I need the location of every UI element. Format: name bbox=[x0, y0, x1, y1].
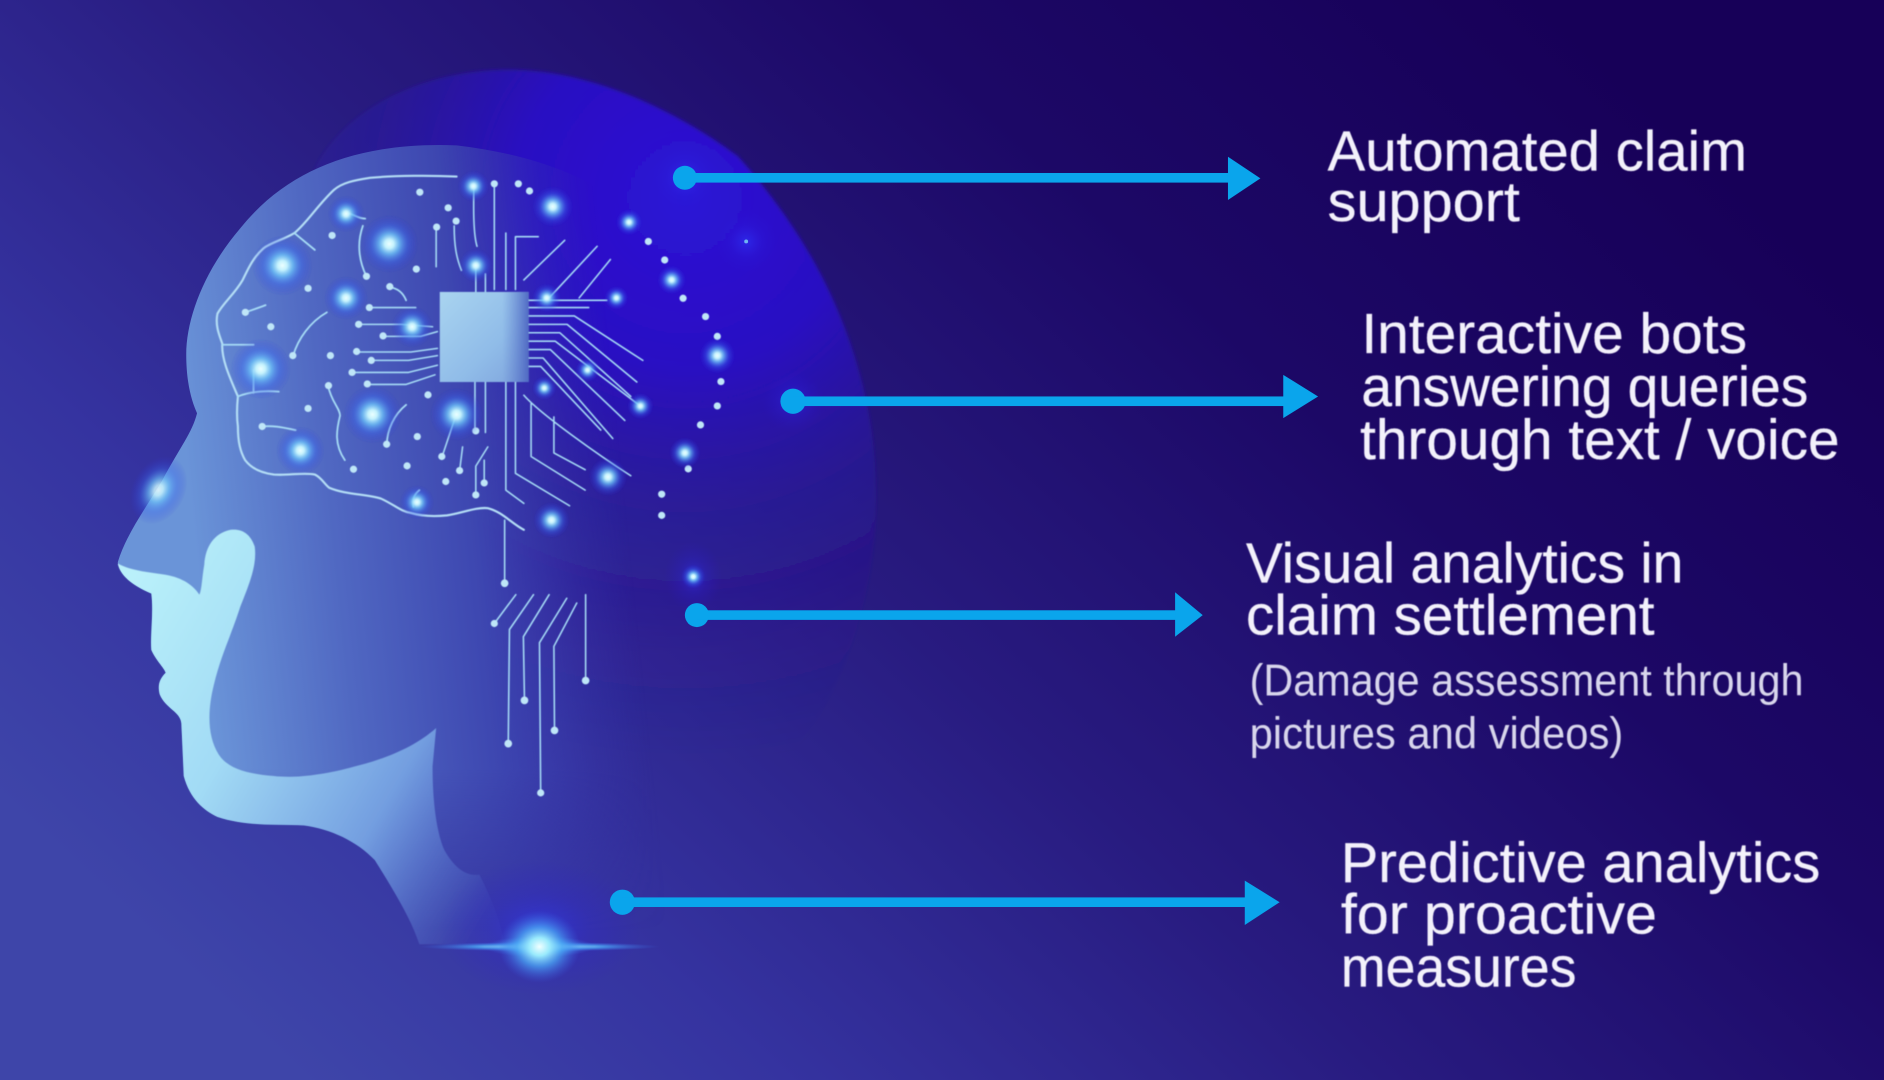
halo dome behind head bbox=[315, 70, 876, 841]
text: visual analytics bbox=[1246, 532, 1803, 758]
text: visual analytics: (Damage assessment through bbox=[1250, 657, 1803, 706]
text: interactive bots: answering queries bbox=[1361, 355, 1808, 418]
small node dots bbox=[242, 180, 725, 796]
glow: nose bridge bbox=[118, 446, 199, 534]
glowing nodes bbox=[231, 171, 735, 538]
glow: spot in dome bbox=[713, 208, 780, 275]
brain folds bbox=[222, 213, 419, 507]
circuit traces around chip bbox=[352, 184, 643, 506]
text: predictive analytics: for proactive bbox=[1341, 882, 1657, 945]
text: automated claim support: support bbox=[1328, 170, 1520, 233]
brain circuit artwork bbox=[217, 171, 735, 796]
text: visual analytics: pictures and videos) bbox=[1250, 709, 1623, 758]
chip bbox=[440, 292, 529, 382]
head silhouette bbox=[118, 145, 592, 874]
arrow 3 bbox=[685, 592, 1203, 637]
glow: behind second arrow dot bbox=[762, 370, 824, 432]
text: automated claim support bbox=[1328, 120, 1747, 233]
text: interactive bots bbox=[1360, 302, 1840, 471]
glow: behind top arrow dot bbox=[646, 139, 723, 216]
text: visual analytics: Visual analytics in bbox=[1246, 532, 1683, 595]
lower circuit traces bbox=[494, 520, 586, 793]
text: predictive analytics bbox=[1341, 831, 1820, 998]
text: predictive analytics: Predictive analytics bbox=[1341, 831, 1820, 894]
star flare at neck bbox=[419, 860, 660, 995]
glow: lone spot by arrow 3 bbox=[664, 542, 722, 611]
head illustration bbox=[117, 145, 592, 944]
arrow 4 bbox=[610, 881, 1280, 925]
arrow 2 bbox=[780, 375, 1318, 418]
text: automated claim support: Automated claim bbox=[1328, 120, 1747, 183]
text: visual analytics: claim settlement bbox=[1246, 583, 1655, 646]
arrow 1 bbox=[673, 157, 1260, 200]
text: interactive bots: Interactive bots bbox=[1361, 302, 1747, 365]
light face and neck bbox=[118, 530, 505, 944]
text: predictive analytics: measures bbox=[1341, 935, 1576, 998]
brain outline bbox=[217, 176, 524, 530]
text: interactive bots: through text / voice bbox=[1360, 408, 1840, 471]
